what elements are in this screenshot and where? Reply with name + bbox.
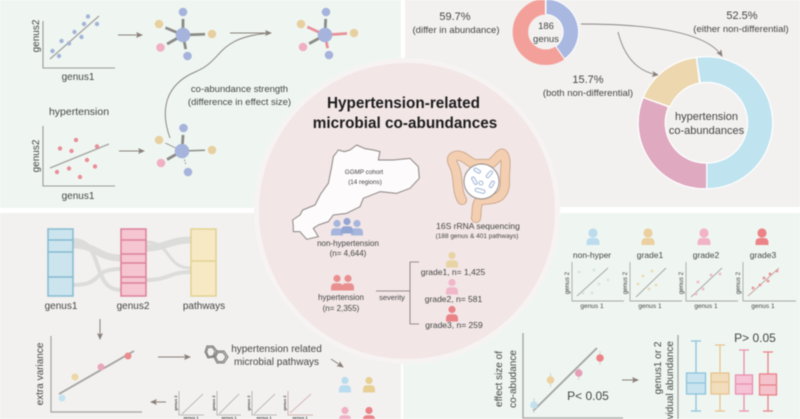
scatter: grade1: genus 1 bbox=[638, 303, 662, 310]
label: 59.7% bbox=[413, 11, 499, 36]
arrow bbox=[158, 356, 190, 358]
sankey flows bbox=[73, 240, 191, 290]
group labels: grade3 bbox=[750, 250, 777, 260]
panel: genus donuts bbox=[405, 0, 800, 207]
sequencing label: (188 genus & 401 pathways) bbox=[436, 233, 518, 240]
non-hypertension group bbox=[317, 218, 379, 258]
hypertension group: (n= 2,355) bbox=[323, 304, 360, 313]
effect size plot: effect size of bbox=[494, 351, 505, 407]
scatter plot: hypertension bbox=[31, 126, 115, 202]
curved arrow bbox=[165, 33, 271, 138]
scatter: grade2: genus 2 bbox=[678, 271, 685, 294]
donut center label bbox=[669, 111, 745, 137]
map: GGMP cohort bbox=[293, 145, 419, 239]
grade3 bbox=[425, 306, 483, 330]
title: Hypertension-related bbox=[327, 95, 480, 112]
scatter: grade3: genus 1 bbox=[751, 303, 775, 310]
group labels: grade1 bbox=[637, 250, 664, 260]
label: 15.7% bbox=[543, 74, 633, 99]
effect size plot bbox=[494, 333, 623, 418]
box plot: P> 0.05 bbox=[734, 331, 776, 345]
extra variance plot bbox=[35, 336, 142, 412]
small donut: 186 genus: genus bbox=[533, 34, 559, 45]
title bbox=[313, 95, 497, 132]
map: GGMP cohort: GGMP cohort bbox=[345, 169, 383, 176]
small donut: 186 genus bbox=[520, 0, 579, 59]
sequencing label bbox=[436, 221, 520, 240]
box plot bbox=[653, 331, 776, 419]
label: 59.7%: (differ in abundance) bbox=[413, 25, 499, 36]
donut center label: hypertension bbox=[675, 111, 738, 123]
label: 52.5%: 52.5% bbox=[726, 10, 758, 22]
scatter: grade3: genus 2 bbox=[735, 271, 742, 294]
arrow bbox=[151, 401, 166, 403]
network: non-hypertension bbox=[152, 5, 219, 63]
hypertension group: hypertension bbox=[318, 293, 364, 302]
sankey column: pathways bbox=[183, 229, 225, 312]
co-abundance label: (difference in effect size) bbox=[188, 97, 291, 108]
arrow bbox=[622, 379, 638, 381]
arrow bbox=[230, 32, 271, 34]
panel: pathways bbox=[0, 213, 401, 419]
mini plots: genus 2 bbox=[246, 395, 251, 411]
icon: gut microbiome bbox=[452, 154, 506, 218]
scatter plot: hypertension: genus2 bbox=[31, 139, 42, 172]
network: difference bbox=[294, 5, 361, 62]
scatter: grade2: genus 1 bbox=[694, 303, 718, 310]
grade2 bbox=[425, 279, 482, 304]
panel: grades bbox=[403, 213, 800, 419]
extra variance plot: extra variance bbox=[35, 342, 46, 405]
label: 52.5% bbox=[693, 10, 789, 35]
mini plots: genus 2 bbox=[173, 395, 178, 411]
sankey column: genus1: genus1 bbox=[45, 301, 78, 312]
label: 59.7%: 59.7% bbox=[439, 11, 471, 23]
co-abundance label bbox=[188, 84, 291, 108]
scatter: non-hyper: genus 2 bbox=[564, 271, 571, 294]
scatter plot: non-hypertension: genus2 bbox=[31, 19, 42, 52]
hypertension group bbox=[318, 275, 364, 313]
arrow bbox=[118, 34, 142, 36]
large donut: hypertension co-abundances bbox=[638, 57, 773, 189]
donut center label: co-abundances bbox=[669, 125, 745, 137]
scatter plot: hypertension: genus1 bbox=[62, 191, 95, 202]
non-hypertension group: non-hypertension bbox=[317, 239, 379, 248]
icon: naphthalene bbox=[205, 346, 228, 363]
mini plots: genus 2 bbox=[211, 395, 216, 411]
scatter: grade3 bbox=[735, 262, 796, 310]
panel: co-abundance networks bbox=[0, 0, 401, 208]
arrow bbox=[99, 319, 101, 339]
co-abundance label: co-abundance strength bbox=[191, 84, 288, 95]
central circle bbox=[254, 58, 560, 364]
mini plots: genus 2 bbox=[282, 395, 287, 411]
icons: groups bbox=[339, 377, 375, 419]
mini plots bbox=[173, 391, 313, 419]
arrow bbox=[331, 359, 343, 367]
network: hypertension bbox=[152, 121, 219, 179]
curved arrows bbox=[581, 24, 722, 75]
label: 15.7%: (both non-differential) bbox=[543, 88, 633, 99]
box plot: genus1 or 2 bbox=[653, 341, 664, 394]
scatter: grade1 bbox=[622, 262, 682, 310]
grade1 bbox=[421, 252, 486, 277]
sequencing label: 16S rRNA sequencing bbox=[436, 221, 520, 231]
effect size plot: P< 0.05 bbox=[567, 389, 609, 403]
non-hypertension group: (n= 4,644) bbox=[330, 249, 367, 258]
group labels: grade2 bbox=[693, 250, 720, 260]
label: 52.5%: (either non-differential) bbox=[693, 24, 789, 35]
sankey column: genus1 bbox=[45, 229, 78, 312]
scatter: non-hyper bbox=[564, 262, 624, 310]
hypertension label: hypertension bbox=[49, 106, 109, 118]
sankey column: genus2: genus2 bbox=[117, 301, 150, 312]
severity branch: severity bbox=[379, 293, 405, 302]
severity branch bbox=[376, 262, 419, 324]
scatter: non-hyper: genus 1 bbox=[580, 303, 604, 310]
effect size plot: co-abudance bbox=[508, 350, 519, 408]
grade1: grade1, n= 1,425 bbox=[421, 267, 486, 277]
scatter: grade2 bbox=[678, 262, 738, 310]
pathways label: microbial pathways bbox=[234, 357, 319, 368]
arrow bbox=[119, 150, 144, 152]
scatter plot: non-hypertension: genus1 bbox=[62, 72, 95, 83]
icons: severity groups bbox=[586, 228, 768, 245]
grade2: grade2, n= 581 bbox=[425, 294, 482, 304]
small donut: 186 genus: 186 bbox=[538, 21, 554, 32]
grade3: grade3, n= 259 bbox=[425, 320, 483, 330]
sankey column: pathways: pathways bbox=[183, 301, 225, 312]
sankey column: genus2 bbox=[117, 229, 150, 312]
scatter plot: non-hypertension bbox=[31, 14, 115, 83]
map: GGMP cohort: (14 regions) bbox=[348, 179, 382, 186]
pathways label: hypertension related bbox=[231, 344, 322, 355]
group labels: non-hyper bbox=[573, 250, 611, 260]
group labels bbox=[573, 250, 777, 260]
label: 15.7%: 15.7% bbox=[572, 74, 604, 86]
scatter: grade1: genus 2 bbox=[622, 271, 629, 294]
title: microbial co-abundances bbox=[313, 115, 497, 132]
pathways label bbox=[231, 344, 322, 368]
